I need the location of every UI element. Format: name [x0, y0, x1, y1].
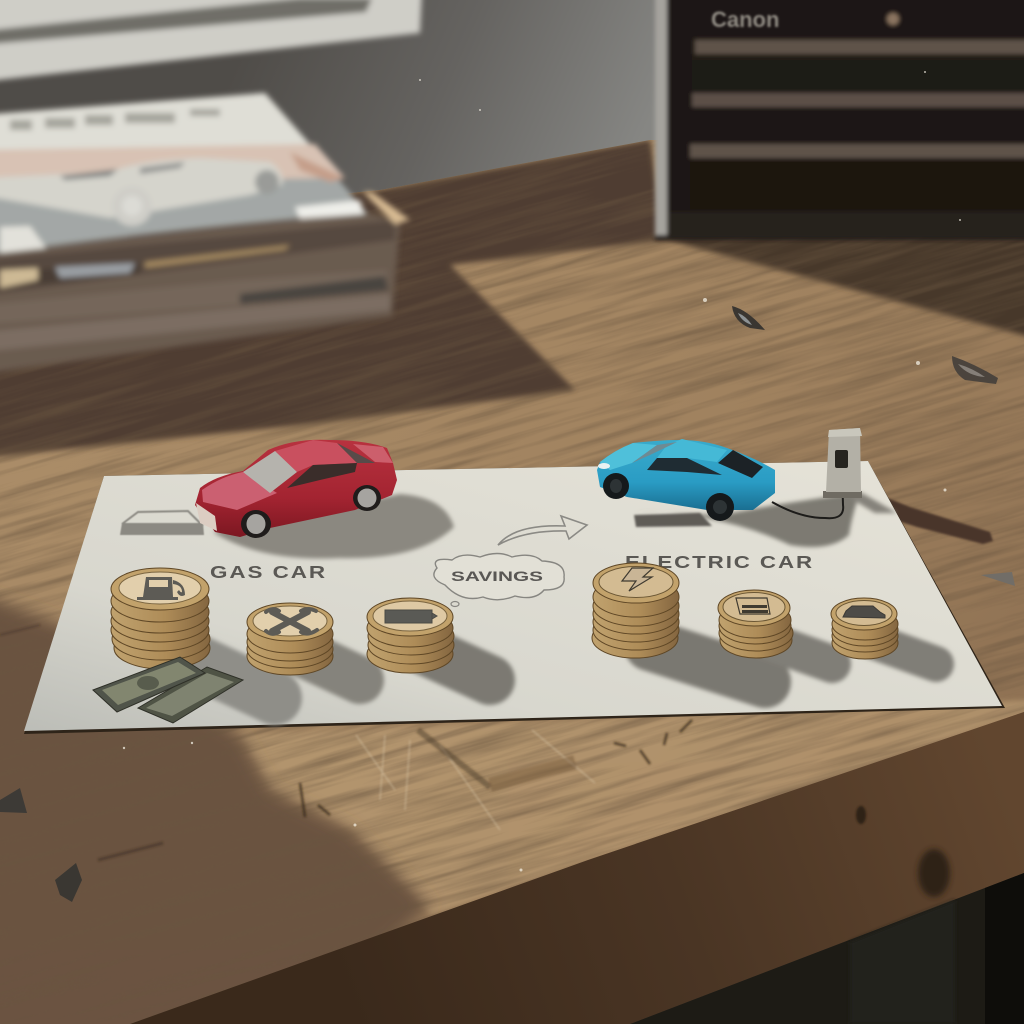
table front edge and floor — [130, 712, 1024, 1024]
savings cloud: SAVINGS — [451, 568, 543, 584]
screw: back right — [952, 356, 998, 384]
icon: small car — [843, 606, 885, 618]
printer: Canon device — [655, 0, 1024, 240]
coin stack: charging — [718, 590, 793, 658]
coin stack: car — [831, 598, 898, 659]
magazine cover — [0, 174, 369, 256]
toy: blue electric car — [597, 439, 775, 521]
printed car silhouette under blue car — [634, 513, 712, 527]
coin stack: battery — [367, 598, 454, 673]
label: gas car: GAS CAR — [210, 562, 327, 582]
label: electric car: ELECTRIC CAR — [625, 552, 814, 572]
charging cable — [772, 470, 843, 518]
charger shadow on wood — [880, 495, 993, 544]
icon: cash bills — [93, 657, 243, 723]
savings cloud — [434, 554, 564, 606]
icon: fuel pump — [137, 577, 185, 600]
coin stack: fuel — [111, 568, 210, 669]
coin stack: maintenance — [247, 603, 333, 675]
screw: right — [981, 572, 1015, 586]
paper sheet — [24, 461, 1005, 734]
printer: Canon device: Canon — [711, 7, 779, 32]
screw: back centre — [732, 306, 765, 330]
screw: bottom left — [55, 863, 82, 902]
icon: lightning bolt — [622, 568, 653, 591]
printed car silhouette — [120, 511, 204, 535]
icon: crossed wrenches — [266, 609, 317, 634]
shadows on paper — [172, 492, 936, 698]
icon: battery level — [736, 598, 770, 614]
toy: EV charging station — [823, 428, 862, 498]
table scratches and cracks — [0, 625, 692, 860]
savings arrow — [498, 516, 587, 545]
toy: red gas car — [195, 440, 397, 538]
magazine stack — [0, 93, 410, 374]
icon: battery pack — [385, 610, 437, 623]
coin stack: electricity — [592, 563, 679, 658]
background wall and window — [0, 0, 658, 193]
screw: lower left — [0, 788, 27, 813]
